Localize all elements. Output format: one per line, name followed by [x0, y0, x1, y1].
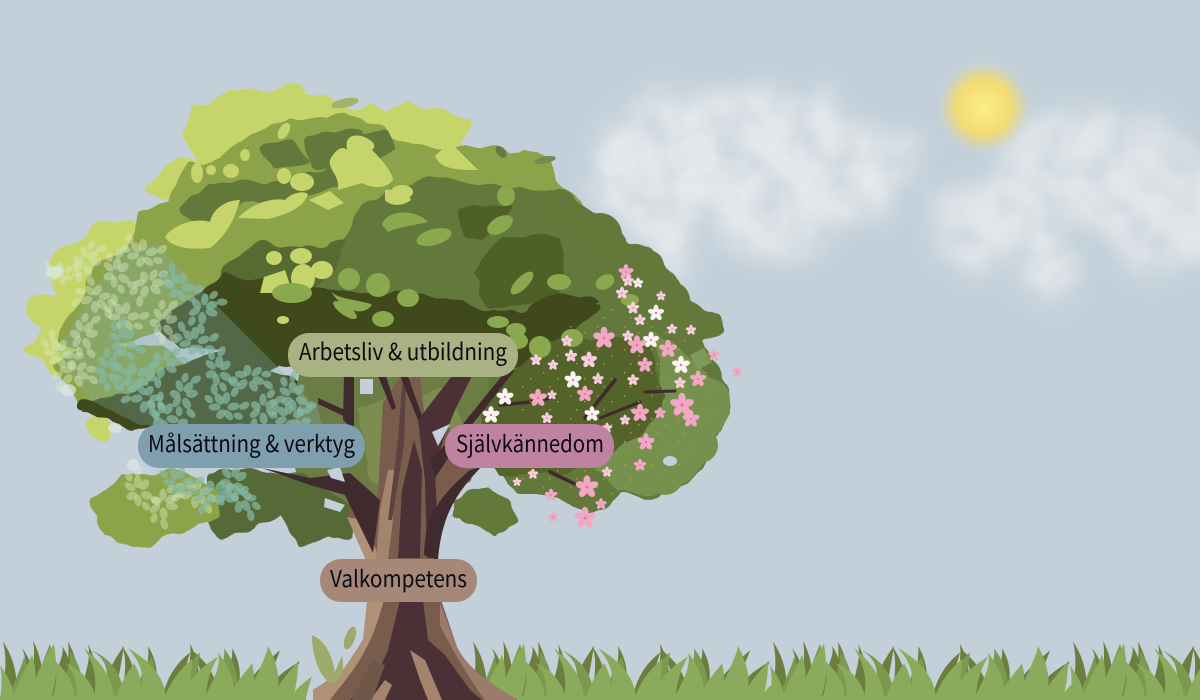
label: Självkännedom [445, 424, 614, 468]
grass left [0, 641, 312, 700]
crown mid leaves [272, 186, 639, 358]
blossom branches [500, 380, 675, 484]
blue-green foliage overlay [32, 229, 322, 533]
cloud left [580, 87, 921, 275]
cloud right [938, 110, 1200, 299]
sky gaps in crown [324, 348, 712, 512]
tree trunk and branches [262, 370, 517, 700]
crown light leaves [165, 121, 478, 324]
grass right [470, 641, 1200, 700]
blossom specks [520, 300, 720, 510]
crown stray leaves [330, 96, 556, 166]
cherry blossoms [482, 264, 743, 529]
label: Arbetsliv & utbildning: Arbetsliv & utbildning [299, 333, 507, 367]
small plant by the trunk [312, 625, 359, 684]
crown edge lobes [97, 189, 730, 547]
tree [28, 88, 743, 700]
label: Målsättning & verktyg: Målsättning & verktyg [148, 425, 355, 459]
sun [937, 60, 1031, 154]
label: Valkompetens: Valkompetens [330, 560, 467, 594]
tree crown layers [28, 88, 726, 544]
label: Självkännedom: Självkännedom [456, 425, 604, 459]
